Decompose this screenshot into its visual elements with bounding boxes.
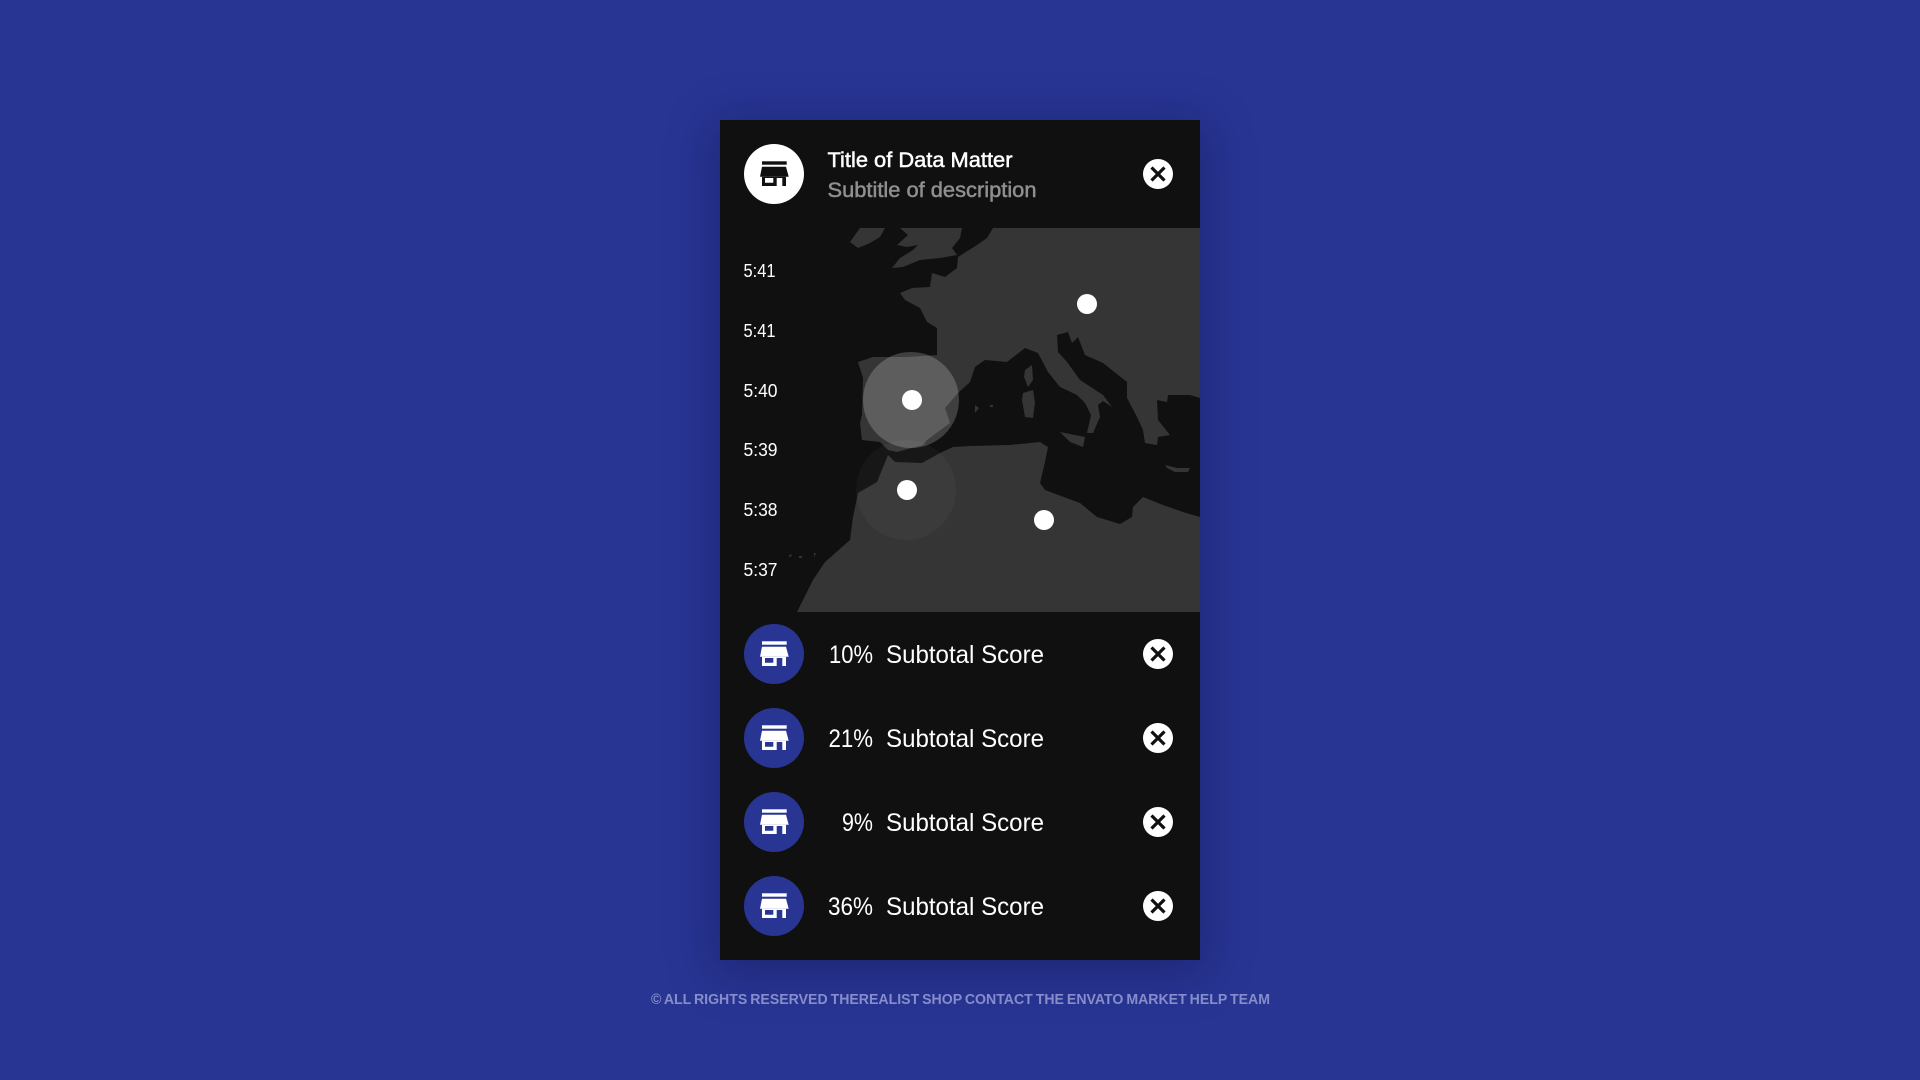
score row 36% [744,876,1173,936]
map marker [1034,510,1054,530]
icon: store [744,792,804,852]
icon: close button [1143,807,1173,837]
map land: Mediterranean islands [975,365,1190,472]
map highlight: faint halo [856,440,956,540]
map marker [902,390,922,410]
score row 9% [744,792,1173,852]
icon: close button [1143,639,1173,669]
time: 5:40 [744,381,778,401]
time: 5:39 [744,440,778,460]
percent: 9% [842,809,873,837]
map marker [897,480,917,500]
time labels [744,261,778,580]
label: Subtotal Score [886,641,1044,669]
icon: store [744,708,804,768]
map land: Ireland [850,228,885,248]
infographic artwork [651,144,1270,1004]
map highlight: bright halo [863,352,959,448]
header row [744,144,1173,204]
percent: 10% [829,641,873,669]
footer copyright: © ALL RIGHTS RESERVED THEREALIST SHOP CONTACT THE ENVATO MARKET HELP TEAM [651,992,1270,1008]
label: Subtotal Score [886,809,1044,837]
icon: store [744,624,804,684]
map of Europe and North Africa [788,228,1200,612]
map marker [1077,294,1097,314]
title: Title of Data Matter [828,149,1012,172]
map land: Canary islands [788,553,816,558]
time: 5:41 [744,261,776,281]
icon: store [744,876,804,936]
time: 5:38 [744,500,778,520]
time: 5:37 [744,560,778,580]
icon: close button [1143,159,1173,189]
panel: card background [720,120,1200,960]
label: Subtotal Score [886,725,1044,753]
icon: close button [1143,723,1173,753]
score row 21% [744,708,1173,768]
map land: Britain [892,228,962,268]
label: Subtotal Score [886,893,1044,921]
map land: Africa [797,442,1200,612]
score row 10% [744,624,1173,684]
icon: close button [1143,891,1173,921]
icon: store in white circle [744,144,804,204]
map land: continental Europe [858,228,1200,452]
time: 5:41 [744,321,776,341]
percent: 21% [828,725,873,753]
subtitle: Subtitle of description [828,179,1036,202]
percent: 36% [828,893,873,921]
